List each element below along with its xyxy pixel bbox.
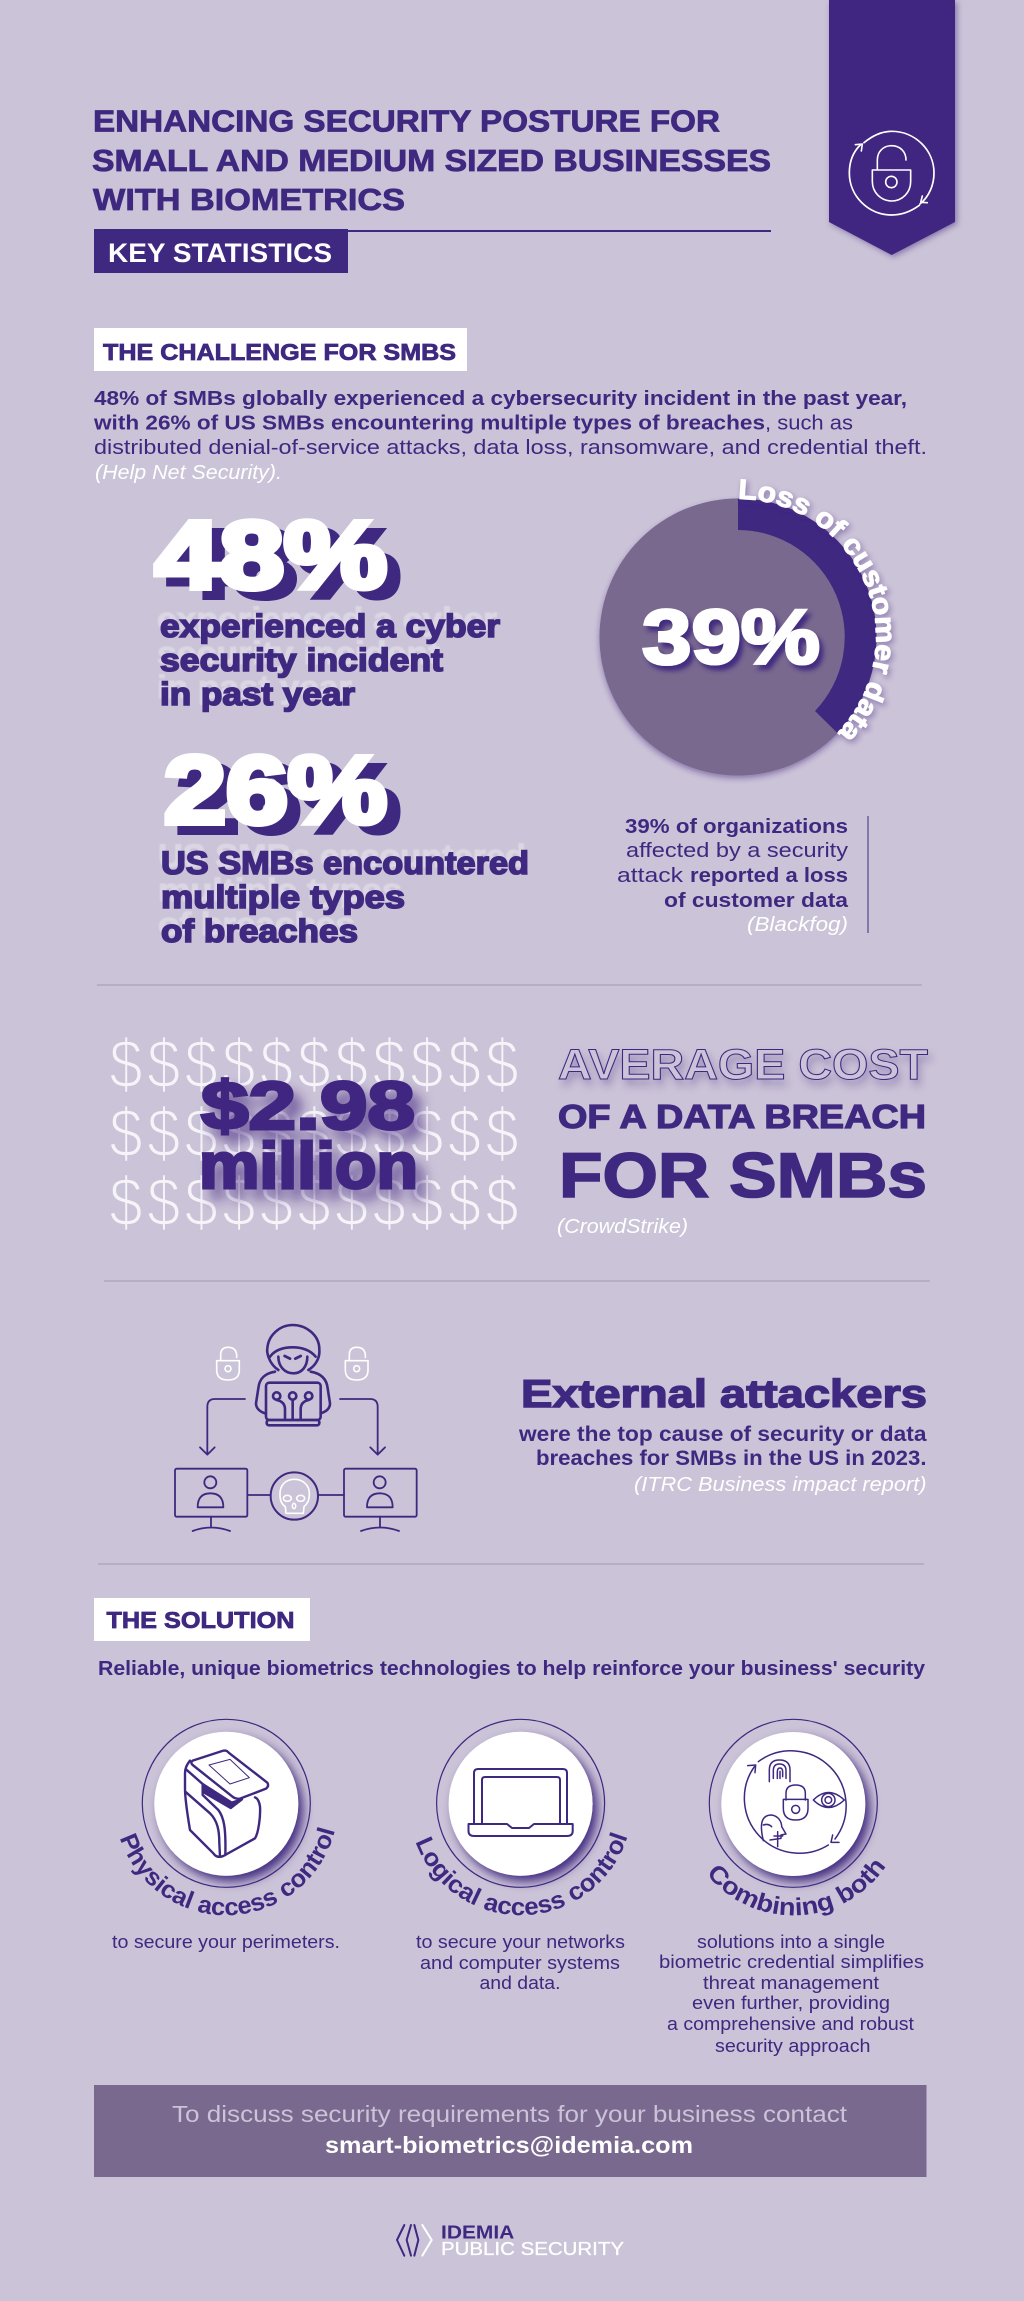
ribbon shape <box>829 0 955 255</box>
heading: key statistics <box>94 229 771 273</box>
text: external attackers: breaches for SMBs in the US in 2023. <box>536 1447 926 1470</box>
description <box>416 1932 625 1993</box>
solution subtitle: Reliable, unique biometrics technologies to help reinforce your business' security <box>98 1657 926 1680</box>
arrows to computers <box>200 1399 385 1455</box>
heading: the challenge for SMBs <box>94 328 467 371</box>
caption: US SMBs encountered multiple types of breaches: of breaches <box>158 906 355 942</box>
caption: US SMBs encountered multiple types of breaches: of breaches <box>161 913 358 949</box>
caption: experienced a cyber security incident <box>157 601 500 712</box>
heading: average cost of a data breach for SMBs: (CrowdStrike) <box>557 1215 688 1238</box>
stat: 48% <box>155 502 500 712</box>
number 26%: 26% <box>164 737 387 844</box>
donut caption: reported a loss <box>690 864 848 887</box>
donut caption: attack <box>617 864 684 887</box>
ring <box>142 1719 310 1887</box>
logo: IDEMIA Public Security <box>397 2221 624 2259</box>
intro paragraph: , such as <box>765 412 853 434</box>
caption: US SMBs encountered multiple types of breaches: multiple types <box>161 879 405 915</box>
ring <box>709 1719 877 1887</box>
description: and data. <box>480 1973 560 1993</box>
icon: fingerprint, lock, eye and face cycle <box>744 1751 846 1853</box>
icon: hacker attacking two computers <box>175 1325 417 1531</box>
description: a comprehensive and robust <box>667 2014 914 2034</box>
caption: experienced a cyber security incident: security incident <box>157 635 440 671</box>
icon: biometric terminal <box>185 1751 268 1857</box>
intro paragraph: distributed denial-of-service attacks, data loss, ransomware, and credential theft. <box>94 436 927 459</box>
hacker figure <box>256 1325 330 1425</box>
description: security approach <box>715 2036 870 2056</box>
icon: open padlock with arrows <box>849 131 934 215</box>
heading: key statistics: KEY STATISTICS <box>108 238 332 268</box>
contact banner: smart-biometrics@idemia.com <box>325 2132 693 2158</box>
description: biometric credential simplifies <box>659 1952 924 1972</box>
title: ENHANCING SECURITY POSTURE FOR <box>93 104 720 138</box>
white disc <box>721 1732 865 1876</box>
icon: laptop <box>468 1769 573 1836</box>
solution: logical access control <box>416 1718 627 1993</box>
caption: experienced a cyber security incident: in past year <box>157 669 352 705</box>
curved label: Physical access control <box>120 1827 334 1916</box>
padlocks <box>217 1347 368 1380</box>
donut chart: 39% loss of customer data <box>596 479 897 782</box>
heading: average cost of a data breach for SMBs: AVERAGE COST <box>558 1041 928 1089</box>
intro paragraph: with 26% of US SMBs encountering multiple types of breaches <box>93 412 765 434</box>
logo mark <box>397 2225 432 2256</box>
pie base <box>600 498 876 776</box>
description: to secure your networks <box>416 1932 625 1952</box>
logo: IDEMIA Public Security: PUBLIC SECURITY <box>441 2238 624 2259</box>
intro paragraph: (Help Net Security). <box>95 461 282 484</box>
curved label: Loss of customer data <box>738 479 897 746</box>
number 48%: 48% <box>155 502 387 609</box>
description: threat management <box>703 1973 879 1993</box>
cost figure: $2.98 million: million <box>199 1129 418 1202</box>
curved label: Logical access control <box>416 1832 627 1916</box>
curved label: Combining both <box>710 1861 886 1916</box>
donut caption: of customer data <box>664 889 849 912</box>
caption: US SMBs encountered multiple types of breaches: US SMBs encountered <box>161 845 529 881</box>
solution: physical access control <box>112 1718 340 1952</box>
dollar sign pattern <box>109 1024 519 1241</box>
description: solutions into a single <box>697 1932 885 1952</box>
caption: US SMBs encountered multiple types of breaches: US SMBs encountered <box>158 838 526 874</box>
description <box>659 1932 924 2056</box>
heading: the challenge for SMBs: THE CHALLENGE FOR SMBS <box>103 339 456 365</box>
donut caption: affected by a security <box>626 839 849 862</box>
contact banner <box>94 2085 926 2177</box>
description: to secure your perimeters. <box>112 1932 340 1952</box>
heading: average cost of a data breach for SMBs <box>557 1041 928 1238</box>
donut caption <box>617 815 868 936</box>
dollar sign pattern: $$$$$$$$$$$ <box>109 1162 519 1241</box>
skull <box>280 1479 309 1513</box>
title: SMALL AND MEDIUM SIZED BUSINESSES <box>92 143 771 178</box>
description: even further, providing <box>692 1993 890 2013</box>
solution: combining both <box>659 1718 924 2056</box>
computers <box>175 1469 417 1531</box>
text: external attackers: (ITRC Business impact report) <box>634 1473 926 1496</box>
ring <box>437 1719 605 1887</box>
caption: US SMBs encountered multiple types of breaches: multiple types <box>158 872 402 908</box>
caption: experienced a cyber security incident: experienced a cyber <box>160 608 500 644</box>
caption: experienced a cyber security incident: security incident <box>160 642 443 678</box>
heading: average cost of a data breach for SMBs: FOR SMBs <box>559 1141 927 1211</box>
text: external attackers: External attackers <box>521 1373 927 1416</box>
39% segment <box>738 498 876 733</box>
heading: the solution: THE SOLUTION <box>106 1607 294 1633</box>
caption: experienced a cyber security incident: in past year <box>160 676 355 712</box>
cost figure: $2.98 million <box>199 1068 418 1202</box>
heading: average cost of a data breach for SMBs: OF A DATA BREACH <box>558 1099 926 1136</box>
dollar sign pattern: $$$$$$$$$$$ <box>109 1024 519 1103</box>
white disc <box>154 1732 298 1876</box>
dollar sign pattern: $$$$$$$$$$$ <box>109 1093 519 1172</box>
caption: US SMBs encountered multiple types of breaches <box>158 838 529 949</box>
description: and computer systems <box>420 1953 620 1973</box>
title: WITH BIOMETRICS <box>93 182 405 217</box>
caption: experienced a cyber security incident: experienced a cyber <box>157 601 497 637</box>
intro paragraph <box>93 387 927 484</box>
text: external attackers <box>518 1373 927 1496</box>
ribbon with lock icon <box>829 0 955 255</box>
logo: IDEMIA Public Security: IDEMIA <box>441 2221 514 2242</box>
title <box>92 104 771 217</box>
value 39%: 39% <box>642 594 820 680</box>
white disc <box>449 1732 593 1876</box>
intro paragraph: 48% of SMBs globally experienced a cybersecurity incident in the past year, <box>94 387 907 410</box>
heading: the solution <box>94 1598 310 1641</box>
text: external attackers: were the top cause of security or data <box>518 1423 927 1446</box>
number 48%: 48% <box>168 511 400 618</box>
cost figure: $2.98 million: $2.98 <box>201 1068 415 1144</box>
contact banner: To discuss security requirements for your business contact <box>172 2101 848 2127</box>
donut caption: (Blackfog) <box>747 913 848 936</box>
number 26%: 26% <box>177 746 400 853</box>
stat: 26% <box>158 737 529 949</box>
donut caption: 39% of organizations <box>625 815 848 838</box>
